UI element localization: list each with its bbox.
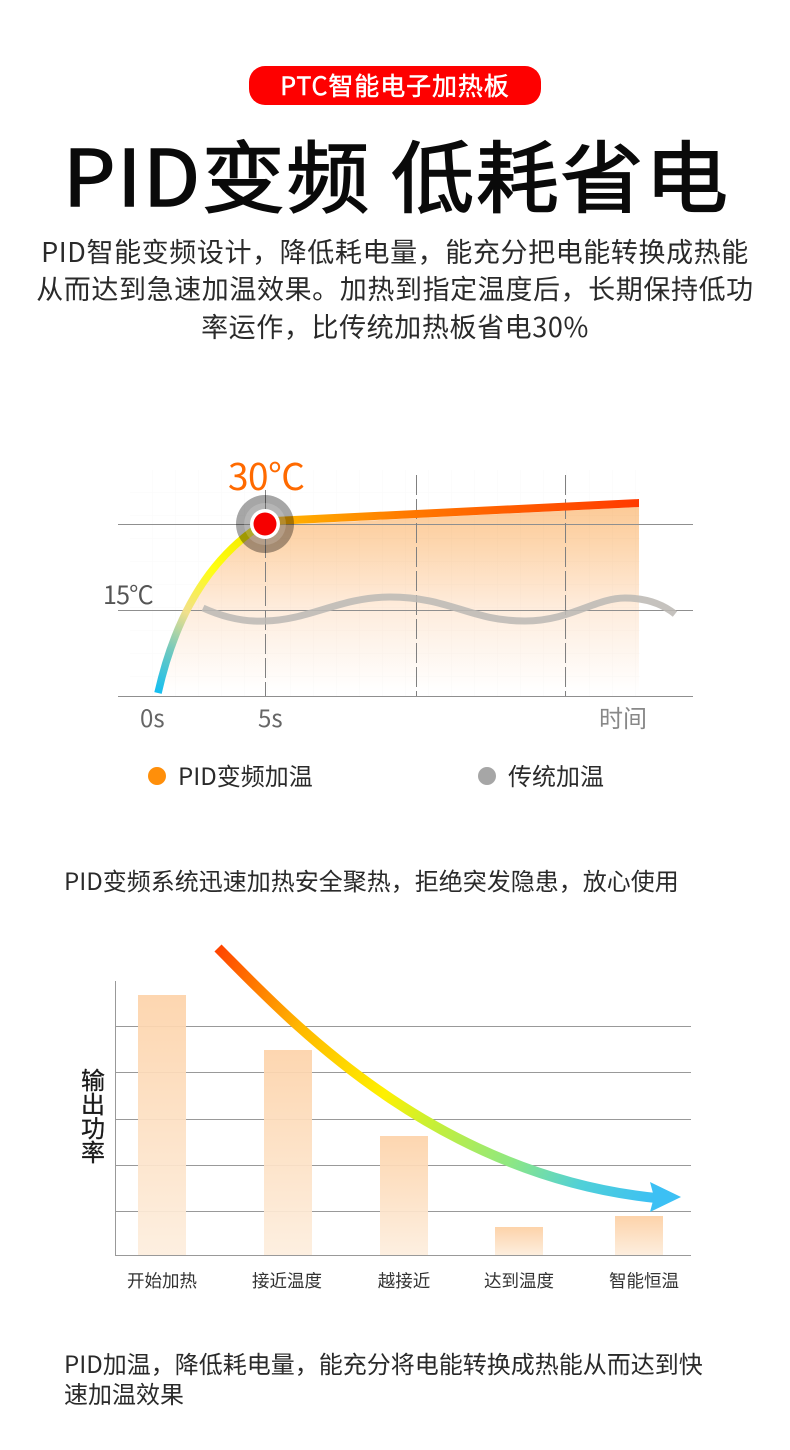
intro paragraph bbox=[36, 230, 754, 344]
caption 2: PID加温，降低耗电量，能充分将电能转换成热能从而达到快 bbox=[64, 1345, 703, 1380]
axis label: 开始加热: 开始加热 bbox=[127, 1268, 197, 1293]
y axis label: 输出功率: 出 bbox=[81, 1085, 105, 1120]
bar: 达到温度 bbox=[495, 1227, 543, 1255]
y axis label: 输出功率: 输 bbox=[81, 1061, 105, 1096]
intro paragraph: PID智能变频设计，降低耗电量，能充分把电能转换成热能 bbox=[41, 230, 749, 270]
caption 2 bbox=[64, 1345, 703, 1410]
axis label: 智能恒温: 智能恒温 bbox=[609, 1268, 679, 1293]
intro paragraph: 率运作，比传统加热板省电30% bbox=[201, 306, 589, 344]
PID steady line bbox=[274, 499, 639, 525]
bar: 智能恒温 bbox=[615, 1216, 663, 1255]
label: 5s: 5s bbox=[258, 699, 283, 734]
caption 1: PID变频系统迅速加热安全聚热，拒绝突发隐患，放心使用 bbox=[64, 862, 679, 897]
legend: PID heating: PID变频加温 bbox=[178, 757, 313, 792]
label: 0s: 0s bbox=[140, 699, 165, 734]
title: PID变频 低耗省电 bbox=[63, 116, 730, 228]
y axis label: 输出功率: 率 bbox=[81, 1133, 105, 1168]
axis label: 达到温度: 达到温度 bbox=[484, 1268, 554, 1293]
declining power arrow bbox=[218, 948, 681, 1212]
y axis label: 输出功率: 功 bbox=[81, 1109, 105, 1144]
marker at 5s bbox=[236, 495, 294, 553]
grid overlay on area bbox=[158, 507, 639, 693]
traditional heating wave bbox=[203, 597, 675, 621]
badge: PTC智能电子加热板: PTC智能电子加热板 bbox=[280, 67, 510, 103]
faint grid background bbox=[130, 470, 640, 696]
axis label: 越接近: 越接近 bbox=[378, 1268, 430, 1293]
axis label: 接近温度: 接近温度 bbox=[252, 1268, 322, 1293]
label: 30°C: 30°C bbox=[228, 447, 304, 501]
bar: 越接近 bbox=[380, 1136, 428, 1255]
bar: 开始加热 bbox=[138, 995, 186, 1255]
bar: 接近温度 bbox=[264, 1050, 312, 1255]
grid lines and axes bbox=[116, 981, 691, 1256]
label: 时间: 时间 bbox=[599, 699, 647, 734]
axis lines bbox=[118, 475, 693, 696]
label: 15°C: 15°C bbox=[103, 576, 154, 612]
y axis label: 输出功率 bbox=[81, 1061, 105, 1168]
legend: traditional heating: 传统加温 bbox=[508, 757, 604, 792]
caption 2: 速加温效果 bbox=[64, 1374, 184, 1410]
PID rising curve bbox=[158, 527, 258, 693]
heated area fill bbox=[158, 507, 639, 693]
intro paragraph: 从而达到急速加温效果。加热到指定温度后，长期保持低功 bbox=[36, 268, 754, 307]
